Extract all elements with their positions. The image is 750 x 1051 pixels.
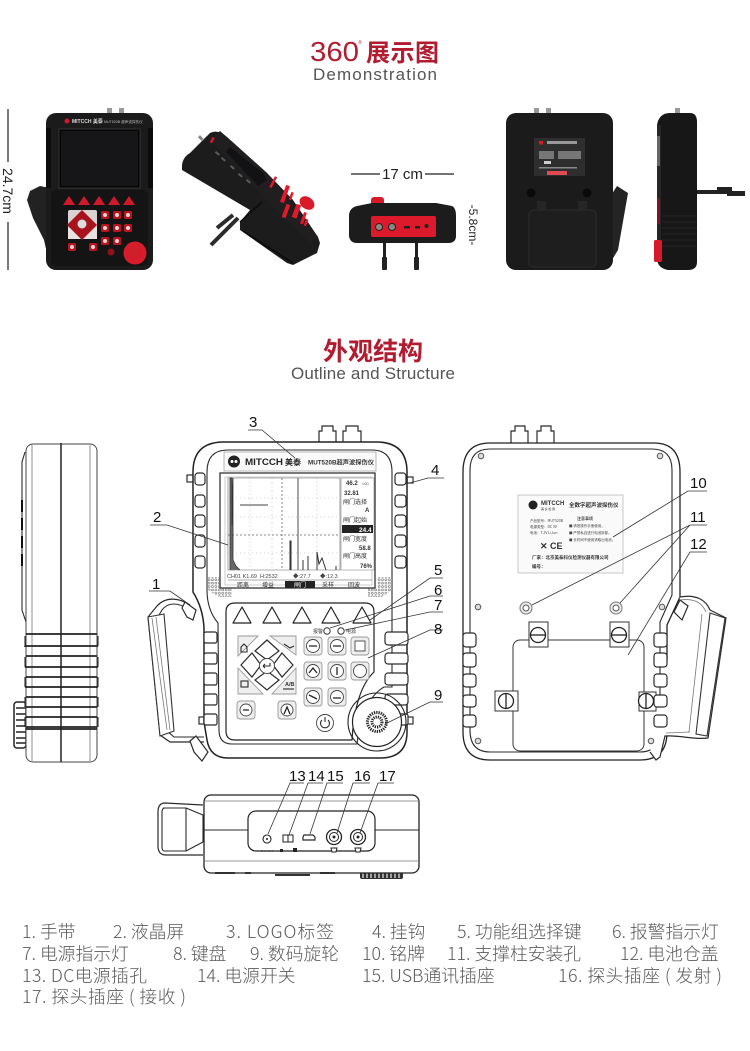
logo strip: 美泰 xyxy=(285,457,301,468)
side buttons xyxy=(195,473,408,725)
graticule xyxy=(228,478,340,570)
dimension: height 24.7cm: 24.7cm xyxy=(0,168,16,214)
pouch edge xyxy=(240,202,293,263)
callouts: bottom view xyxy=(268,768,396,835)
USB port xyxy=(303,835,315,840)
legend: numbered part names: 2. 液晶屏 xyxy=(113,918,184,944)
connectors xyxy=(107,108,112,114)
inner contour xyxy=(207,450,392,744)
screen xyxy=(226,147,267,186)
dimension: depth 5.8cm: -5.8cm- xyxy=(466,205,480,245)
diagram: back view xyxy=(463,426,726,760)
tabs: 距离 xyxy=(237,580,249,589)
nameplate: ■ 请按操作手册使用。 xyxy=(569,523,605,529)
power key xyxy=(108,248,114,256)
dimension: width 17 cm xyxy=(351,166,454,183)
screws xyxy=(475,453,665,744)
soft keys xyxy=(63,196,135,205)
grip bands xyxy=(25,634,98,729)
side menu: ≈00 xyxy=(362,481,369,486)
d-pad xyxy=(68,210,97,239)
gate line xyxy=(240,504,268,506)
logo strip xyxy=(224,452,376,471)
diagram: left side view xyxy=(14,443,98,762)
body xyxy=(46,113,153,270)
photo: back view of device xyxy=(506,108,628,270)
dimension: width 17 cm: 17 cm xyxy=(382,166,423,183)
legend: numbered part names: 14. 电源开关 xyxy=(197,962,296,988)
callouts: back view: 10 xyxy=(690,475,707,492)
legend: numbered part names: 12. 电池仓盖 xyxy=(620,940,719,966)
side slots xyxy=(215,151,251,184)
callouts: front view: 4 xyxy=(431,462,439,479)
legend: numbered part names: 4. 挂钩 xyxy=(372,918,425,944)
port panel xyxy=(371,216,436,237)
LCD screen: ◆:12.3 xyxy=(320,573,338,580)
side menu: 闸门起始 xyxy=(343,515,367,524)
legend: numbered part names: 16. 探头插座 ( 发射 ) xyxy=(558,962,722,988)
legend: numbered part names: 17. 探头插座 ( 接收 ) xyxy=(22,983,186,1009)
callouts: front view: 7 xyxy=(434,597,442,614)
legend: numbered part names: 3. LOGO标签 xyxy=(226,918,334,944)
nameplate: 全数字超声波探伤仪 xyxy=(569,501,619,509)
side buttons xyxy=(463,633,667,727)
red knob xyxy=(297,193,317,213)
kickstand xyxy=(211,215,238,245)
callouts: front view: 1 xyxy=(152,576,160,593)
port panel xyxy=(248,811,375,851)
body xyxy=(349,203,456,243)
body xyxy=(26,444,97,762)
legend: numbered part names xyxy=(22,918,722,1009)
LCD screen: ◆:27.7 xyxy=(293,573,311,580)
red knob xyxy=(371,197,384,206)
digital knob xyxy=(348,693,406,751)
side menu: 闸门高度 xyxy=(343,551,367,560)
callouts: bottom view: 16 xyxy=(354,768,371,785)
side menu: 24.4 xyxy=(359,527,372,534)
photo: front view of device: MITCCH 美泰 xyxy=(72,118,103,125)
title: outline and structure: Outline and Structure xyxy=(291,364,455,383)
legend: numbered part names: 5. 功能组选择键 xyxy=(457,918,582,944)
speaker grills xyxy=(208,577,392,597)
nameplate: ■ 严禁私自进行电池拆卸。 xyxy=(569,530,612,536)
indicator lights: 电源 xyxy=(346,628,356,635)
legend: numbered part names: 11. 支撑柱安装孔 xyxy=(447,940,581,966)
side menu: 32.81 xyxy=(344,491,360,497)
photo: front view of device: MUT520B 超声波探伤仪 xyxy=(104,119,143,124)
callouts: bottom view: 14 xyxy=(308,768,325,785)
side menu: 46.2 xyxy=(346,481,358,487)
callouts: front view: 5 xyxy=(434,562,442,579)
nameplate: 电池：7.2V Li-Ion xyxy=(530,530,558,536)
side menu: 58.8 xyxy=(359,546,371,552)
status row: CH01 K1.69 xyxy=(227,574,257,580)
body xyxy=(204,795,419,873)
callouts: front view: 9 xyxy=(434,687,442,704)
legend: numbered part names: 6. 报警指示灯 xyxy=(612,918,719,944)
logo strip: MITCCH xyxy=(245,457,283,468)
handle xyxy=(650,596,726,760)
red keys xyxy=(269,176,308,226)
DC jack xyxy=(263,835,271,843)
keyboard panel xyxy=(226,603,374,740)
side menu: 闸门选择 xyxy=(343,497,367,506)
knob xyxy=(14,702,26,748)
strap loop xyxy=(158,803,203,855)
logo mark xyxy=(210,137,215,143)
legend: numbered part names: 8. 键盘 xyxy=(173,940,226,966)
battery cover xyxy=(513,640,644,751)
nameplate: MITCCH xyxy=(541,501,564,507)
case outline xyxy=(463,443,680,760)
nameplate: 产品型号：MUT520B xyxy=(530,518,564,524)
legend: numbered part names: 1. 手带 xyxy=(22,918,75,944)
knob xyxy=(360,871,403,879)
callouts: bottom view: 17 xyxy=(379,768,396,785)
body xyxy=(506,113,613,270)
title: 360 demonstration: Demonstration xyxy=(313,65,437,84)
callouts: front view: 3 xyxy=(249,414,257,431)
callouts: back view: 12 xyxy=(690,536,707,553)
photo: side view of device xyxy=(654,108,745,270)
legend: numbered part names: 15. USB通讯插座 xyxy=(362,962,495,988)
direction pad xyxy=(238,636,296,694)
BNC connectors xyxy=(319,426,361,442)
red knob xyxy=(124,242,146,264)
soft key triangles xyxy=(233,607,371,623)
side menu xyxy=(341,478,374,570)
strap handle xyxy=(148,599,208,761)
indicator lights xyxy=(313,628,356,635)
outer case xyxy=(193,442,407,758)
callouts: back view xyxy=(532,475,707,655)
hook tabs xyxy=(187,475,194,482)
support posts xyxy=(520,602,622,614)
callouts: bottom view: 15 xyxy=(327,768,344,785)
photo: front view of device xyxy=(27,108,153,270)
indicator lights: 报警 xyxy=(313,628,323,635)
nameplate: 美 泰 检 测 xyxy=(541,506,555,511)
LCD screen xyxy=(220,473,375,589)
tabs: 闸门 xyxy=(294,580,306,589)
function keys xyxy=(237,637,369,719)
nameplate xyxy=(534,138,585,176)
battery door xyxy=(529,210,596,267)
title: 360 demonstration: 展示图 xyxy=(366,33,439,68)
top connector xyxy=(198,135,204,141)
logo strip: MUT520B超声波探伤仪 xyxy=(308,458,374,466)
BNC connectors xyxy=(511,426,554,443)
connectors xyxy=(534,108,539,114)
legend: numbered part names: 13. DC电源插孔 xyxy=(22,962,147,988)
callouts: front view: 8 xyxy=(434,621,442,638)
posts xyxy=(526,188,536,198)
photo: angled view with kickstand xyxy=(182,131,320,265)
front bezel xyxy=(210,131,318,243)
callouts: front view: 2 xyxy=(153,509,161,526)
tabs: 采样 xyxy=(322,580,334,589)
legend: numbered part names: 10. 铭牌 xyxy=(362,940,425,966)
screen xyxy=(59,129,140,188)
direction pad: A/B xyxy=(285,682,294,688)
tabs: 增益 xyxy=(262,580,274,589)
red knob xyxy=(654,240,662,262)
tabs xyxy=(228,580,372,589)
nameplate: 编号： xyxy=(532,563,546,570)
strap xyxy=(27,186,60,268)
nameplate: 厂家：北京美泰科仪检测仪器有限公司 xyxy=(532,554,609,561)
nameplate: 注意事项 xyxy=(577,515,593,522)
probe sockets xyxy=(326,830,366,852)
title: outline and structure xyxy=(291,332,455,383)
power key xyxy=(316,714,334,732)
legend: numbered part names: 9. 数码旋轮 xyxy=(250,940,339,966)
legend: numbered part names: 7. 电源指示灯 xyxy=(22,940,129,966)
connector xyxy=(675,108,680,114)
echo peaks xyxy=(230,478,240,570)
power switch xyxy=(283,835,293,842)
diagram: bottom view with ports xyxy=(158,795,419,879)
title: 360 demonstration xyxy=(310,33,439,84)
nameplate: ✕ CE xyxy=(540,541,563,551)
side menu: A xyxy=(365,508,370,514)
photo: bottom view with ports xyxy=(349,197,456,270)
front edge xyxy=(22,452,26,622)
title: outline and structure: 外观结构 xyxy=(323,332,423,368)
side menu: 76% xyxy=(360,564,373,570)
callouts: back view: 11 xyxy=(690,509,706,526)
LCD screen: H:2532 xyxy=(260,574,278,580)
legs xyxy=(383,243,386,259)
strap xyxy=(600,186,628,268)
body xyxy=(657,113,697,270)
callouts: front view xyxy=(149,414,444,724)
stand xyxy=(696,187,745,196)
tabs: 回波 xyxy=(348,580,360,589)
side menu: 闸门宽度 xyxy=(343,534,367,543)
body xyxy=(182,132,320,265)
keypad xyxy=(68,211,132,251)
nameplate xyxy=(518,495,623,573)
nameplate: 电源类型：DC 9V xyxy=(530,524,557,530)
callouts: front view: 6 xyxy=(434,582,442,599)
callouts: bottom view: 13 xyxy=(289,768,306,785)
nameplate: ■ 长时间不使用请取出电池。 xyxy=(569,537,615,543)
logo xyxy=(64,118,70,124)
latches xyxy=(495,622,656,711)
title: 360 demonstration: ° xyxy=(358,40,362,51)
title: 360 demonstration: 360 xyxy=(310,36,359,67)
diagram: front view xyxy=(148,426,413,761)
